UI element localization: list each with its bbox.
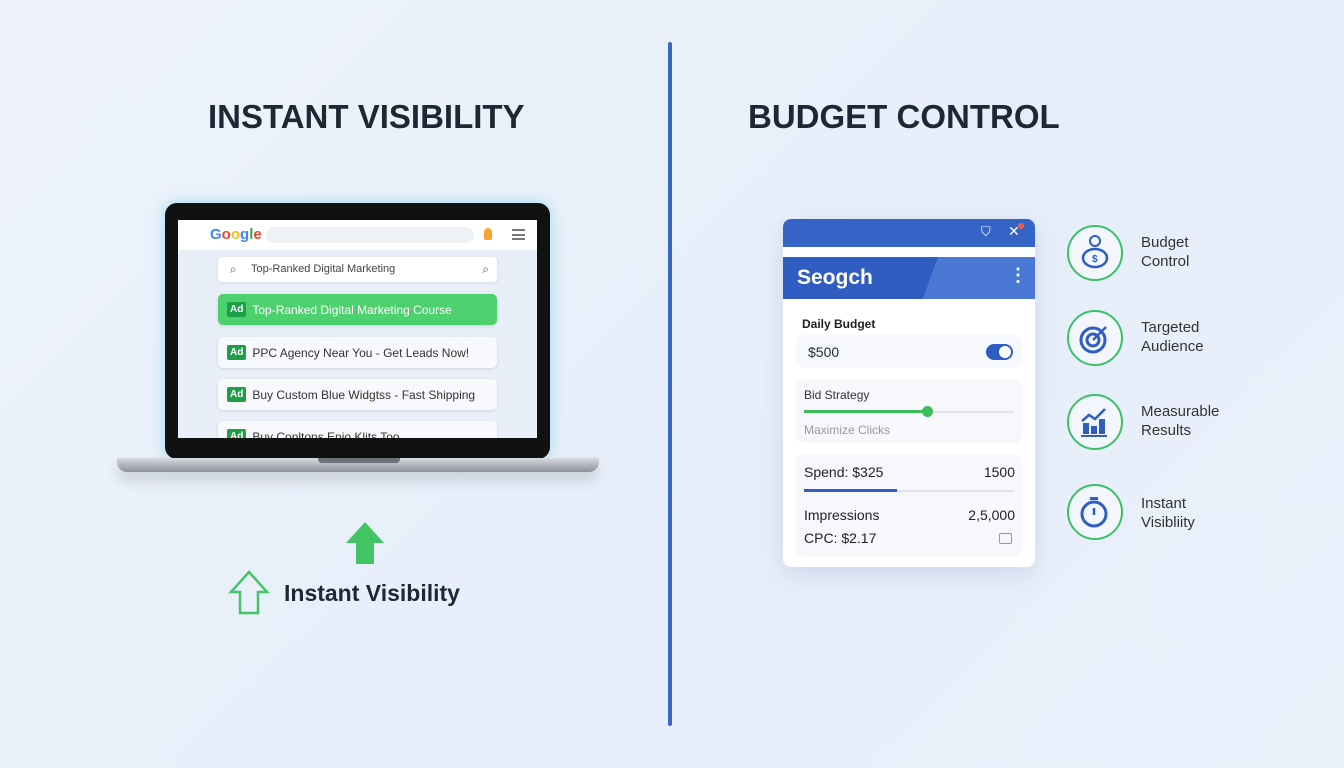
panel: ad dashboard: [783, 219, 1035, 567]
ad 4: [218, 421, 497, 452]
ad: highlighted: Top-Ranked Digital Marketing Course: [252, 302, 452, 316]
top bar: [783, 219, 1035, 247]
search box: [218, 257, 497, 282]
instant visibility label: [228, 570, 460, 614]
header: Seogch: [797, 266, 873, 289]
spend stats: 2,5,000: [968, 507, 1015, 523]
google header: Google: [210, 226, 262, 243]
top bar: ⛉: [981, 224, 991, 239]
feature: targeted audience: Audience: [1141, 338, 1204, 355]
feature: budget control: [1067, 225, 1189, 281]
top bar: ✕: [1008, 223, 1020, 239]
laptop: [115, 194, 601, 485]
spend stats: Spend: $325: [804, 464, 883, 480]
header: [783, 257, 1035, 299]
feature: budget control: Budget: [1141, 234, 1189, 251]
laptop bezel: [165, 203, 550, 459]
icon: piggy bank: [1067, 225, 1123, 281]
title: instant visibility: INSTANT VISIBILITY: [208, 98, 525, 135]
ad: highlighted: [218, 294, 497, 325]
header: ⋮: [1009, 265, 1027, 285]
ad: highlighted: Ad: [230, 304, 243, 315]
spend stats: CPC: $2.17: [804, 530, 876, 546]
title: budget control: BUDGET CONTROL: [748, 98, 1060, 135]
icon: solid up arrow: [346, 522, 384, 564]
icon: chart: [1067, 394, 1123, 450]
ad 3: Ad: [230, 389, 243, 400]
feature: instant visibility: Visibliity: [1141, 514, 1195, 531]
search box: Top-Ranked Digital Marketing: [251, 263, 395, 275]
icon: piggy bank: $: [1092, 254, 1098, 265]
bid strategy: Bid Strategy: [804, 388, 869, 402]
icon: outline arrow: [228, 570, 270, 614]
bid strategy: [796, 379, 1022, 443]
feature: targeted audience: Targeted: [1141, 319, 1199, 336]
ad 2: PPC Agency Near You - Get Leads Now!: [252, 346, 469, 360]
daily budget: Daily Budget: [802, 317, 875, 331]
ad 3: Buy Custom Blue Widgtss - Fast Shipping: [252, 388, 475, 402]
bid strategy: Maximize Clicks: [804, 423, 890, 437]
feature: budget control: Control: [1141, 253, 1189, 270]
feature: instant visibility: [1067, 484, 1195, 540]
feature: measurable results: Results: [1141, 422, 1191, 439]
ad 3: [218, 379, 497, 410]
laptop base: [117, 458, 599, 472]
ad 2: Ad: [230, 347, 243, 358]
divider: [668, 42, 672, 726]
feature: measurable results: [1067, 394, 1219, 450]
spend stats: Impressions: [804, 507, 879, 523]
panel: ad dashboard: $500: [808, 344, 839, 360]
icon: stopwatch: [1067, 484, 1123, 540]
spend stats: 1500: [984, 464, 1015, 480]
search box: ⌕: [230, 262, 237, 276]
ad 2: [218, 337, 497, 368]
feature: instant visibility: Instant: [1141, 495, 1186, 512]
instant visibility label: Instant Visibility: [284, 580, 460, 606]
spend stats: [796, 454, 1022, 557]
icon: target: [1067, 310, 1123, 366]
search box: ⌕: [482, 262, 489, 276]
screen: [178, 220, 537, 438]
feature: measurable results: Measurable: [1141, 403, 1219, 420]
google header: [178, 220, 537, 250]
feature: targeted audience: [1067, 310, 1204, 366]
